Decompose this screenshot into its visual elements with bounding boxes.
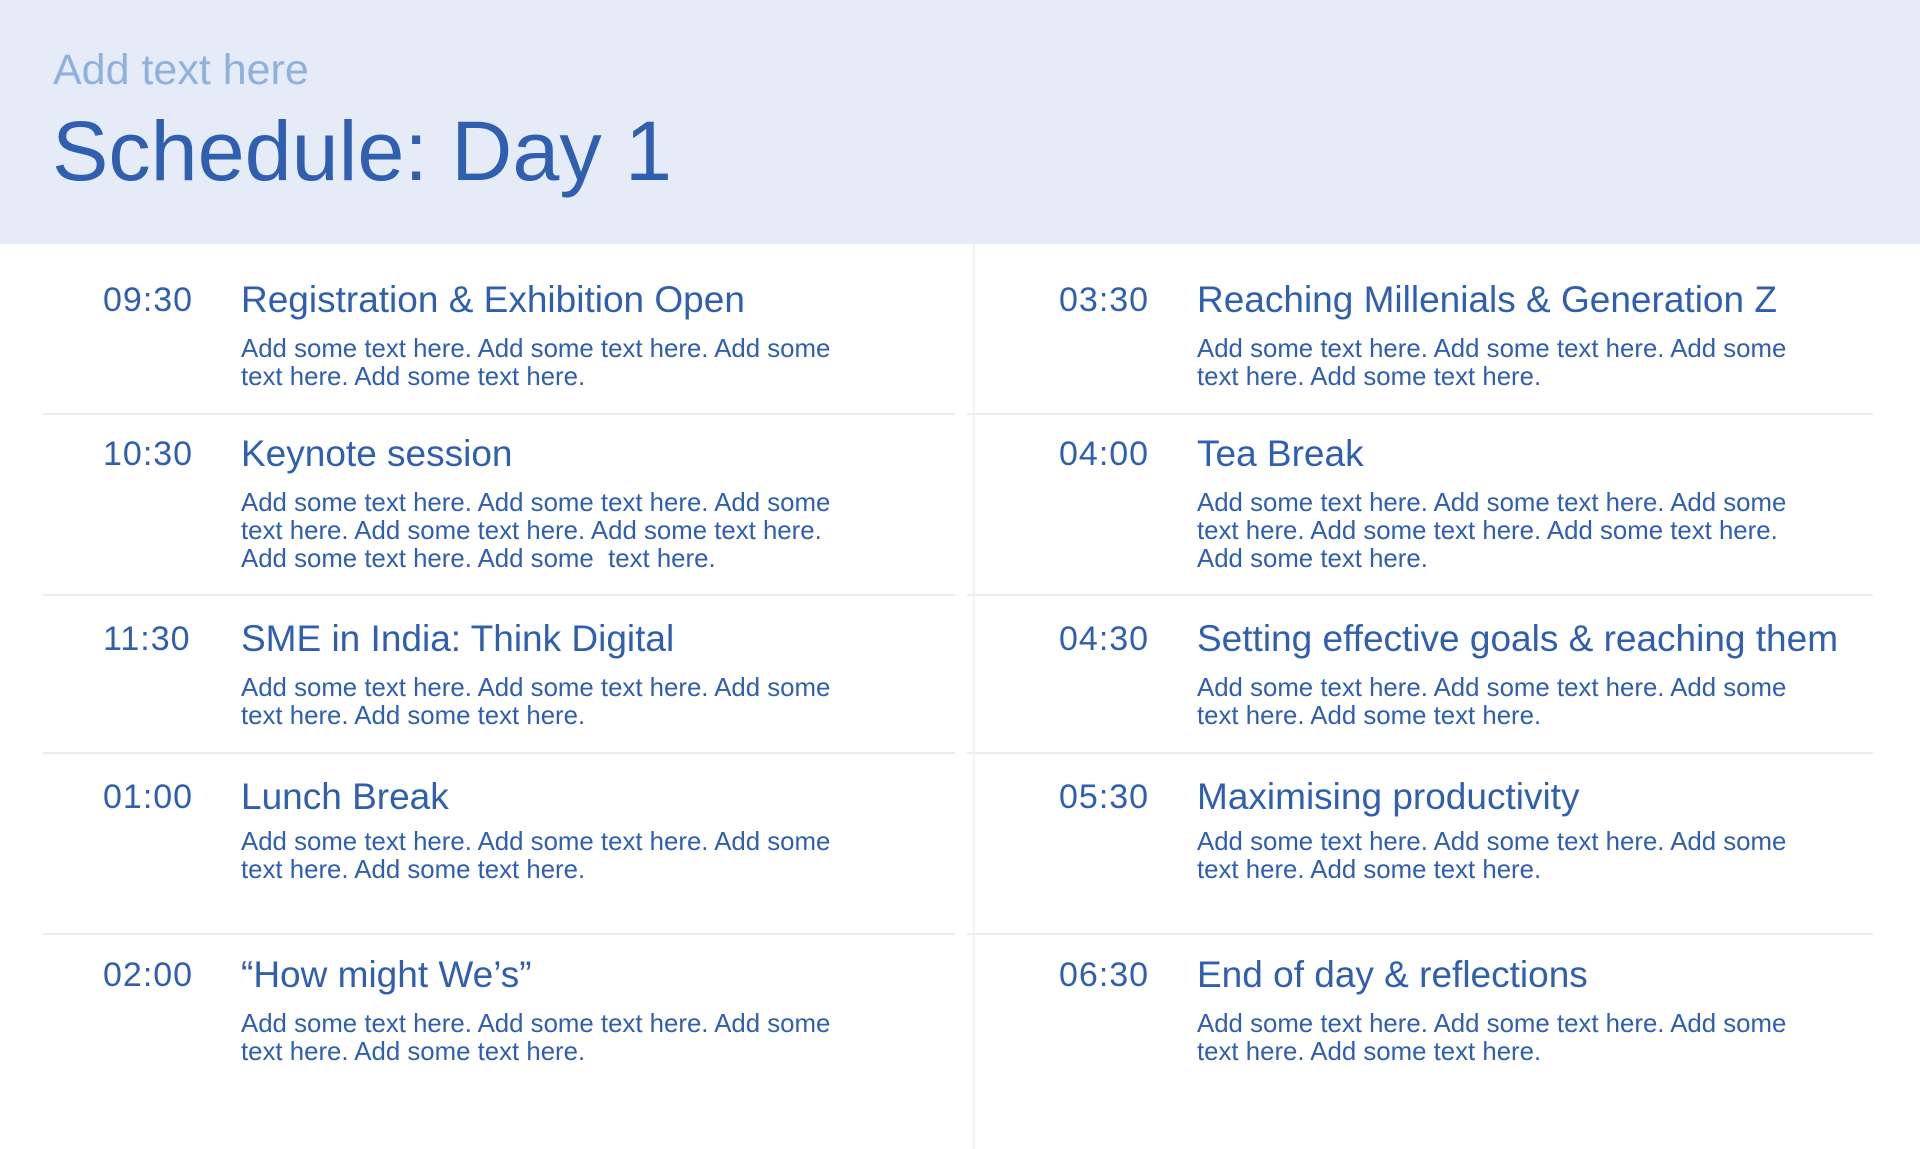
row: 02:00: text here. Add some text here. (241, 1038, 585, 1066)
row: 09:30: Add some text here. Add some text here. Add some (241, 335, 830, 363)
row: 04:00 (1059, 433, 1786, 573)
row: 02:00: “How might We’s” (241, 954, 532, 995)
row: 02:00: Add some text here. Add some text here. Add some (241, 1010, 830, 1038)
row: 03:30: text here. Add some text here. (1197, 363, 1541, 391)
row: 06:30 (1059, 954, 1786, 1066)
row: 04:30: Add some text here. Add some text here. Add some (1197, 674, 1786, 702)
row: 05:30: text here. Add some text here. (1197, 856, 1541, 884)
row: 04:30: 04:30 (1059, 620, 1149, 658)
row: 06:30: End of day & reflections (1197, 954, 1588, 995)
header band (0, 0, 1920, 244)
row: 04:30 (1059, 618, 1838, 730)
row: 05:30: 05:30 (1059, 778, 1149, 816)
row: 02:00: 02:00 (103, 956, 193, 994)
row: 03:30: Reaching Millenials & Generation Z (1197, 279, 1777, 320)
row: 11:30: text here. Add some text here. (241, 702, 585, 730)
row: 11:30: 11:30 (103, 620, 191, 658)
row: 11:30: SME in India: Think Digital (241, 618, 674, 659)
row: 01:00: Lunch Break (241, 776, 449, 817)
row: 09:30: 09:30 (103, 281, 193, 319)
title: Schedule: Day 1 (52, 104, 672, 198)
row: 11:30 (103, 618, 830, 730)
row: 09:30: Registration & Exhibition Open (241, 279, 745, 320)
row: 03:30: Add some text here. Add some text here. Add some (1197, 335, 1786, 363)
row: 04:00: text here. Add some text here. Add some text here. (1197, 517, 1778, 545)
row: 04:30: Setting effective goals & reaching them (1197, 618, 1838, 659)
row: 01:00: text here. Add some text here. (241, 856, 585, 884)
row: 04:30: text here. Add some text here. (1197, 702, 1541, 730)
row: 01:00: 01:00 (103, 778, 193, 816)
row: 04:00: Add some text here. (1197, 545, 1428, 573)
row: 05:30: Add some text here. Add some text here. Add some (1197, 828, 1786, 856)
row: 06:30: Add some text here. Add some text here. Add some (1197, 1010, 1786, 1038)
row: 10:30: text here. Add some text here. Add some text here. (241, 517, 822, 545)
row: 05:30 (1059, 776, 1786, 884)
subtitle: Add text here (53, 46, 309, 94)
row: 01:00: Add some text here. Add some text here. Add some (241, 828, 830, 856)
row: 04:00: Tea Break (1197, 433, 1364, 474)
row: 10:30: Add some text here. Add some text here. Add some (241, 489, 830, 517)
row: 02:00 (103, 954, 830, 1066)
row: 10:30: 10:30 (103, 435, 193, 473)
row: 11:30: Add some text here. Add some text here. Add some (241, 674, 830, 702)
row: 09:30 (103, 279, 830, 391)
row: 04:00: Add some text here. Add some text here. Add some (1197, 489, 1786, 517)
row: 10:30: Add some text here. Add some text here. (241, 545, 716, 573)
row: 10:30 (103, 433, 830, 573)
row: 09:30: text here. Add some text here. (241, 363, 585, 391)
row: 03:30 (1059, 279, 1786, 391)
row: 06:30: text here. Add some text here. (1197, 1038, 1541, 1066)
row: 10:30: Keynote session (241, 433, 513, 474)
row: 05:30: Maximising productivity (1197, 776, 1579, 817)
row: 03:30: 03:30 (1059, 281, 1149, 319)
row: 04:00: 04:00 (1059, 435, 1149, 473)
row: 01:00 (103, 776, 830, 884)
row: 06:30: 06:30 (1059, 956, 1149, 994)
